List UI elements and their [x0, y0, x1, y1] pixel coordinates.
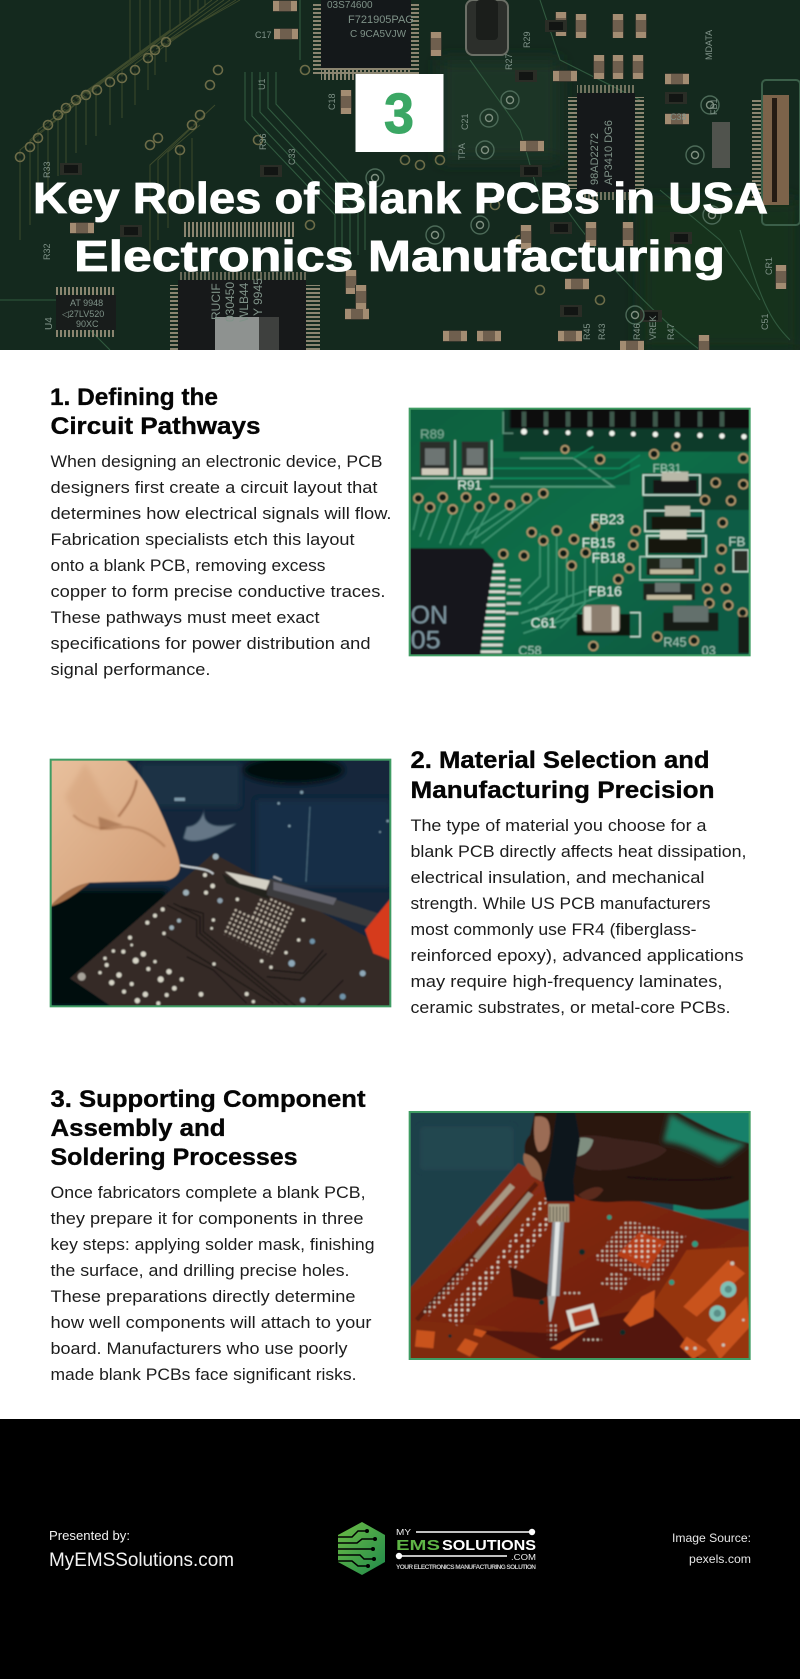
logo wordmark: YOUR ELECTRONICS MANUFACTURING SOLUTION — [396, 1564, 536, 1571]
silkscreen labels: C51 — [760, 313, 770, 330]
chip: U4: U4 — [44, 317, 55, 330]
solder points on photo 2 — [78, 854, 366, 1005]
body: section 1: specifications for power distribution and — [50, 634, 370, 653]
image source credit: pexels.com — [689, 1552, 751, 1566]
section 3 text — [50, 1086, 374, 1384]
heading: section 3: Assembly and — [50, 1115, 226, 1142]
heading: section 3 — [50, 1086, 365, 1171]
body: section 3: made blank PCBs face significant risks. — [50, 1365, 356, 1384]
body: section 1: determines how electrical signals will flow. — [50, 504, 392, 523]
body: section 2: strength. While US PCB manufacturers — [410, 894, 710, 913]
chip: right centre: AP3410 DG6 — [603, 120, 615, 185]
silkscreen labels: CR1 — [764, 257, 774, 275]
chip: U4 — [44, 287, 116, 337]
chip: bottom centre: Y 9945 — [251, 278, 265, 316]
silkscreen labels: R29 — [522, 31, 532, 48]
soldering iron on photo 2 — [222, 872, 391, 960]
board on photo 2 — [70, 853, 391, 1007]
logo wordmark: .COM — [511, 1553, 536, 1562]
chip on photo 1: ON — [411, 601, 448, 629]
presented by credit — [49, 1529, 234, 1571]
hero banner: circuit board photo — [0, 0, 800, 359]
silkscreen labels on photo 1: 03 — [702, 644, 716, 658]
heading: section 2: 2. Material Selection and — [410, 747, 710, 774]
body: section 1: When designing an electronic device, PCB — [50, 452, 382, 471]
section 1 text — [50, 384, 392, 679]
silkscreen labels on photo 1: FB — [728, 534, 745, 549]
silkscreen labels: VREK — [648, 315, 658, 340]
silkscreen labels: R33 — [42, 161, 52, 178]
chip: right centre: 98AD2272 — [589, 133, 601, 185]
body: section 2: electrical insulation, and mechanical — [410, 868, 704, 887]
body: section 3: board. Manufacturers who use poorly — [50, 1339, 348, 1358]
silkscreen labels: C18 — [327, 93, 337, 110]
silkscreen labels on photo 1: R89 — [420, 426, 444, 441]
silkscreen labels: R46 — [632, 323, 642, 340]
header strip — [184, 222, 296, 237]
silkscreen labels on photo 1: R91 — [457, 477, 482, 492]
silkscreen labels: C33 — [287, 148, 297, 165]
photo 2: soldering a dark board by hand — [50, 757, 391, 1007]
body: section 2: ceramic substrates, or metal-core PCBs. — [410, 998, 730, 1017]
silkscreen labels — [42, 30, 774, 340]
presented by credit: Presented by: — [49, 1529, 130, 1543]
silkscreen labels on photo 1: FB23 — [591, 511, 624, 527]
silkscreen labels: R27 — [504, 53, 514, 70]
section 2 text — [410, 747, 746, 1017]
body: section 1: onto a blank PCB, removing excess — [50, 556, 326, 575]
chip: bottom centre — [170, 272, 320, 350]
title — [33, 174, 768, 281]
heading: section 2 — [410, 747, 714, 804]
chip: U4: AT 9948 — [70, 298, 103, 308]
chip: bottom centre: WLB44 — [237, 282, 251, 322]
body: section 1 — [50, 452, 392, 679]
hand on photo 3 — [523, 1112, 750, 1210]
hand on photo 2 — [50, 759, 180, 907]
silkscreen labels: R47 — [666, 323, 676, 340]
silkscreen labels: U1 — [257, 78, 267, 90]
silkscreen labels on photo 1: FB18 — [592, 549, 625, 565]
connector — [752, 80, 800, 225]
body: section 3: Once fabricators complete a blank PCB, — [50, 1183, 366, 1202]
chip: bottom centre: 030450 — [223, 282, 237, 322]
number badge: 3 — [384, 82, 414, 146]
silkscreen labels on photo 1: FB31 — [653, 462, 682, 476]
body: section 2: may require high-frequency laminates, — [410, 972, 722, 991]
logo wordmark: MY — [396, 1528, 412, 1537]
silkscreen labels: R32 — [42, 243, 52, 260]
silkscreen labels: C38 — [670, 112, 687, 122]
silkscreen labels on photo 1: C61 — [531, 614, 557, 630]
silkscreen labels on photo 1 — [420, 426, 745, 658]
logo wordmark — [396, 1528, 536, 1571]
presented by credit: MyEMSSolutions.com — [49, 1550, 234, 1571]
board on photo 3 — [410, 1163, 750, 1359]
chip: top centre — [313, 0, 419, 80]
silkscreen labels on photo 1: FB15 — [582, 534, 615, 550]
resistors on photo 1 — [412, 440, 750, 653]
heading: section 1 — [50, 384, 260, 440]
chip: top centre: F721905PAG — [348, 14, 414, 26]
body: section 3: These preparations directly determine — [50, 1287, 356, 1306]
chip on photo 1 — [410, 548, 521, 656]
chip: right centre — [568, 85, 644, 200]
footer — [0, 1419, 800, 1679]
silkscreen labels: FB1 — [709, 98, 719, 115]
silkscreen labels: C17 — [255, 30, 272, 40]
chip: U4: 90XC — [76, 319, 99, 329]
photo 1: green circuit board — [409, 408, 750, 658]
chip: top centre: C 9CA5VJW — [350, 29, 407, 40]
silkscreen labels on photo 1: R45 — [663, 636, 687, 650]
body: section 2: reinforced epoxy), advanced applications — [410, 946, 744, 965]
small module — [712, 122, 730, 168]
title: Electronics Manufacturing — [74, 232, 725, 281]
crystal component — [466, 0, 508, 55]
silkscreen labels: R43 — [597, 323, 607, 340]
title: Key Roles of Blank PCBs in USA — [33, 174, 768, 223]
chip: U4: ◁27LV520 — [62, 309, 104, 319]
body: section 3: how well components will attach to your — [50, 1313, 372, 1332]
body: section 3: key steps: applying solder mask, finishing — [50, 1235, 374, 1254]
logo hexagon icon — [338, 1522, 385, 1575]
body: section 2: most commonly use FR4 (fiberglass- — [410, 920, 696, 939]
body: section 2 — [410, 816, 746, 1017]
silkscreen labels: C21 — [460, 113, 470, 130]
heading: section 3: 3. Supporting Component — [50, 1086, 365, 1113]
photo 3: soldering iron on a red board — [409, 1112, 750, 1359]
number badge — [356, 74, 444, 152]
body: section 3 — [50, 1183, 374, 1384]
silkscreen labels: R36 — [258, 133, 268, 150]
orange pads on photo 3 — [415, 1260, 750, 1359]
body: section 1: copper to form precise conductive traces. — [50, 582, 385, 601]
silkscreen labels on photo 1: FB16 — [588, 583, 622, 599]
silkscreen labels: TPA — [457, 143, 467, 160]
image source credit: Image Source: — [672, 1531, 751, 1545]
silkscreen labels on photo 1: C58 — [518, 644, 542, 658]
logo: My EMS Solutions — [338, 1522, 536, 1575]
body: section 1: These pathways must meet exact — [50, 608, 320, 627]
silkscreen labels: R45 — [582, 323, 592, 340]
body: section 3: the surface, and drilling precise holes. — [50, 1261, 350, 1280]
heading: section 1: Circuit Pathways — [50, 413, 260, 440]
heading: section 2: Manufacturing Precision — [410, 777, 714, 804]
heading: section 1: 1. Defining the — [50, 384, 218, 411]
body: section 1: designers first create a circuit layout that — [50, 478, 378, 497]
body: section 1: Fabrication specialists etch this layout — [50, 530, 355, 549]
surface-mount components — [60, 0, 787, 359]
chip: bottom centre: RUCIF — [209, 283, 223, 320]
chip on photo 1: 05 — [411, 626, 441, 654]
logo wordmark: EMS — [396, 1537, 440, 1554]
body: section 3: they prepare it for components in three — [50, 1209, 364, 1228]
heading: section 3: Soldering Processes — [50, 1144, 298, 1171]
body: section 1: signal performance. — [50, 660, 210, 679]
logo wordmark: SOLUTIONS — [442, 1537, 536, 1554]
silkscreen labels: MDATA — [704, 30, 714, 60]
body: section 2: The type of material you choose for a — [410, 816, 707, 835]
body: section 2: blank PCB directly affects heat dissipation, — [410, 842, 746, 861]
chip: top centre: 03S74600 — [327, 0, 373, 11]
soldering iron on photo 3 — [543, 1112, 580, 1322]
image source credit — [672, 1531, 751, 1566]
